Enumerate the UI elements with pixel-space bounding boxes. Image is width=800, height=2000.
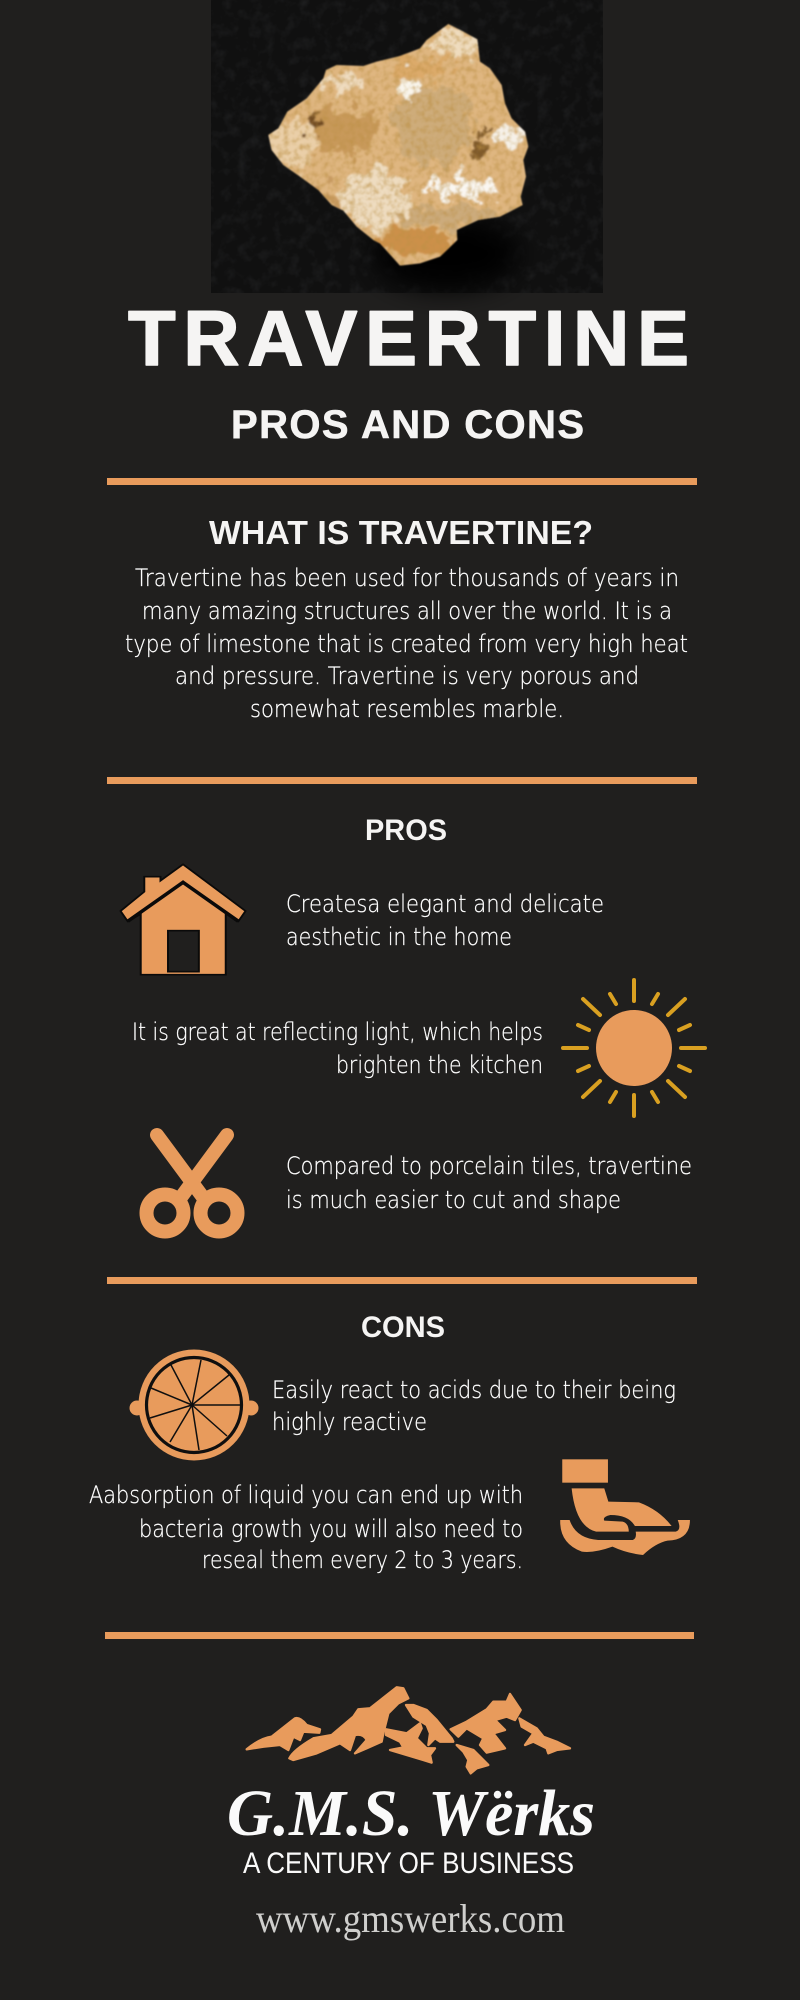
- icon: hand and liquid: [560, 1459, 690, 1555]
- text: pro 1: [286, 890, 604, 951]
- text: pro 1: aesthetic in the home: [286, 923, 512, 951]
- text: pro 2: brighten the kitchen: [336, 1051, 543, 1079]
- text: pro 3: [286, 1152, 692, 1214]
- panel: pros: [121, 814, 705, 1232]
- body paragraph: Travertine has been used for thousands of years in: [135, 564, 679, 592]
- panel: what is travertine: [125, 514, 688, 723]
- panel: cons: [89, 1311, 690, 1574]
- subtitle: PROS AND CONS: [231, 403, 584, 447]
- text: con 1: [272, 1376, 676, 1436]
- heading: cons: CONS: [361, 1311, 445, 1344]
- text: con 2: [89, 1481, 523, 1574]
- text: pro 2: It is great at reflecting light, which helps: [132, 1018, 543, 1046]
- body paragraph: type of limestone that is created from very high heat: [125, 630, 688, 658]
- icon: mountains: [247, 1687, 570, 1773]
- title: TRAVERTINE: [128, 294, 689, 382]
- body paragraph: many amazing structures all over the world. It is a: [142, 597, 672, 625]
- logo tagline: A CENTURY OF BUSINESS: [243, 1847, 574, 1880]
- text: pro 2: [132, 1018, 543, 1079]
- text: con 2: reseal them every 2 to 3 years.: [202, 1546, 523, 1574]
- icon: house: [121, 864, 246, 975]
- text: con 1: highly reactive: [272, 1408, 427, 1436]
- icon: scissors: [146, 1135, 238, 1232]
- body paragraph: [125, 564, 688, 723]
- icon: sun: [563, 980, 705, 1116]
- text: con 2: bacteria growth you will also need to: [139, 1515, 523, 1543]
- heading: pros: PROS: [365, 814, 447, 847]
- text: pro 1: Createsa elegant and delicate: [286, 890, 604, 918]
- logo: G.M.S. Wërks: [227, 1687, 595, 1941]
- website url: www.gmswerks.com: [256, 1896, 565, 1941]
- text: con 1: Easily react to acids due to their being: [272, 1376, 676, 1404]
- text: pro 3: Compared to porcelain tiles, travertine: [286, 1152, 692, 1180]
- text: con 2: Aabsorption of liquid you can end up with: [89, 1481, 523, 1509]
- icon: lemon slice: [130, 1350, 258, 1460]
- photo: travertine rock on black surface: [211, 0, 603, 293]
- body paragraph: and pressure. Travertine is very porous and: [175, 662, 639, 690]
- body paragraph: somewhat resembles marble.: [250, 695, 564, 723]
- text: pro 3: is much easier to cut and shape: [286, 1186, 621, 1214]
- logo wordmark: G.M.S. Wërks: [227, 1777, 595, 1850]
- heading: what is travertine: WHAT IS TRAVERTINE?: [209, 514, 593, 551]
